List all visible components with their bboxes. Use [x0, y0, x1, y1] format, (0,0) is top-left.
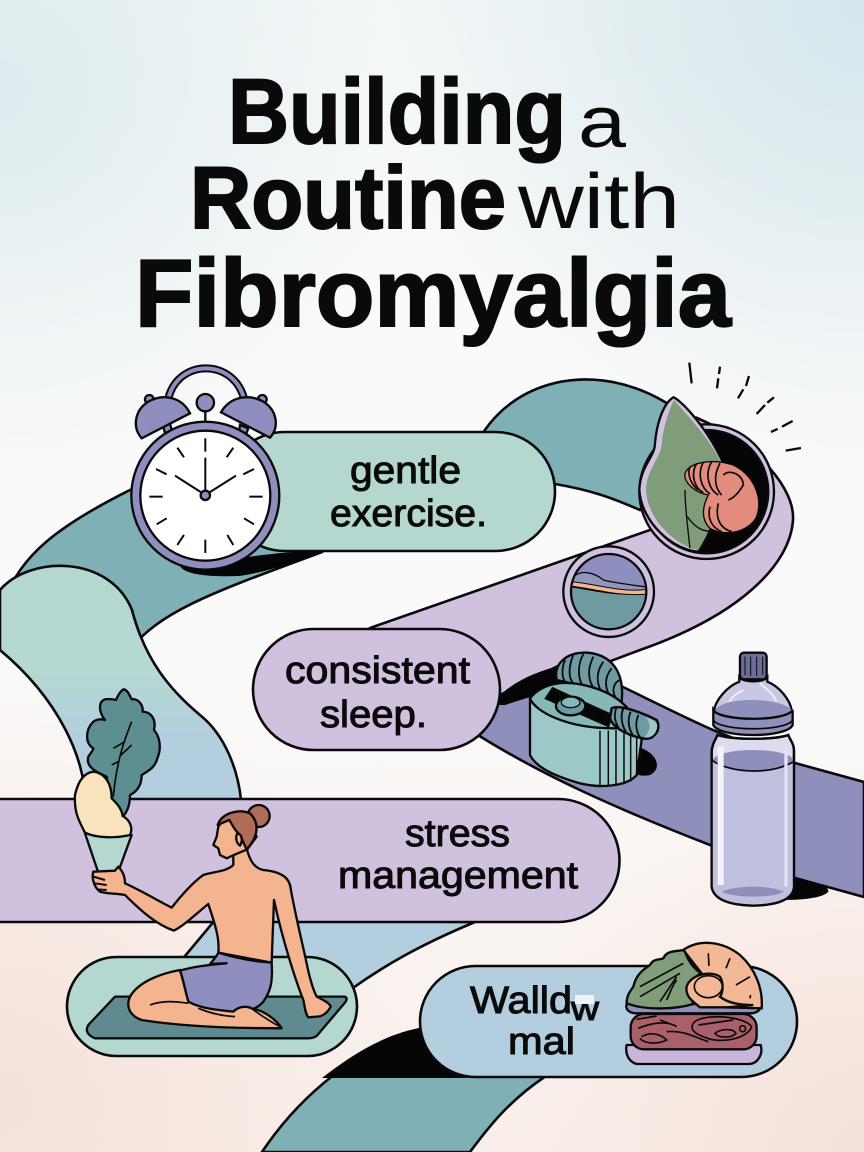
path ribbon: teal upper	[470, 379, 700, 510]
pill: stress management: management	[338, 855, 578, 897]
path ribbon: teal bottom	[262, 1026, 546, 1152]
pill: consistent sleep: consistent	[285, 650, 470, 692]
pill: meal: w	[570, 990, 599, 1028]
pill: stress management: stress	[405, 813, 510, 855]
title: with	[517, 157, 680, 245]
yoga mat	[87, 997, 347, 1038]
pill: gentle exercise	[225, 432, 555, 551]
leg	[128, 970, 282, 1028]
path ribbon: mint to blue blob	[0, 566, 241, 800]
body	[93, 848, 331, 1017]
icon: skin layer circle	[563, 546, 654, 637]
icon: alarm clock	[131, 368, 279, 570]
icon: water bottle	[712, 653, 828, 906]
shorts	[180, 953, 272, 1012]
icon: avocado and shrimp porthole	[639, 397, 774, 559]
sun rays	[689, 363, 801, 451]
path ribbon: blue lower	[180, 920, 475, 990]
title: a	[578, 83, 627, 163]
pill: gentle exercise: gentle	[350, 450, 461, 492]
path ribbon: lavender	[300, 418, 793, 720]
title	[135, 61, 732, 347]
shadow under exercise pill	[180, 550, 326, 576]
pill: meal: Walld	[470, 980, 572, 1022]
pill: meal	[420, 966, 797, 1077]
shadow above meal pill	[322, 1027, 470, 1078]
icon: kettle weight	[530, 653, 658, 787]
pill: consistent sleep	[253, 629, 500, 750]
shadow under sleep pill	[490, 665, 575, 705]
head	[213, 815, 257, 858]
title: Building	[228, 61, 566, 163]
icon: person with mat and plant cone	[75, 689, 347, 1038]
pill: meal: mal	[508, 1021, 575, 1063]
cone	[85, 833, 132, 873]
title: Fibromyalgia	[135, 240, 732, 347]
pill: consistent sleep: sleep.	[320, 694, 427, 736]
path ribbon: periwinkle	[470, 665, 864, 897]
leaf	[87, 689, 160, 816]
pill: gentle exercise: exercise.	[330, 493, 487, 535]
title: Routine	[190, 148, 506, 247]
pill: stress management	[0, 799, 620, 922]
pill: yoga mat platform	[67, 957, 357, 1056]
ice cream top	[75, 772, 131, 837]
icon: sandwich meal	[626, 943, 762, 1064]
path ribbon: teal left	[5, 440, 322, 650]
